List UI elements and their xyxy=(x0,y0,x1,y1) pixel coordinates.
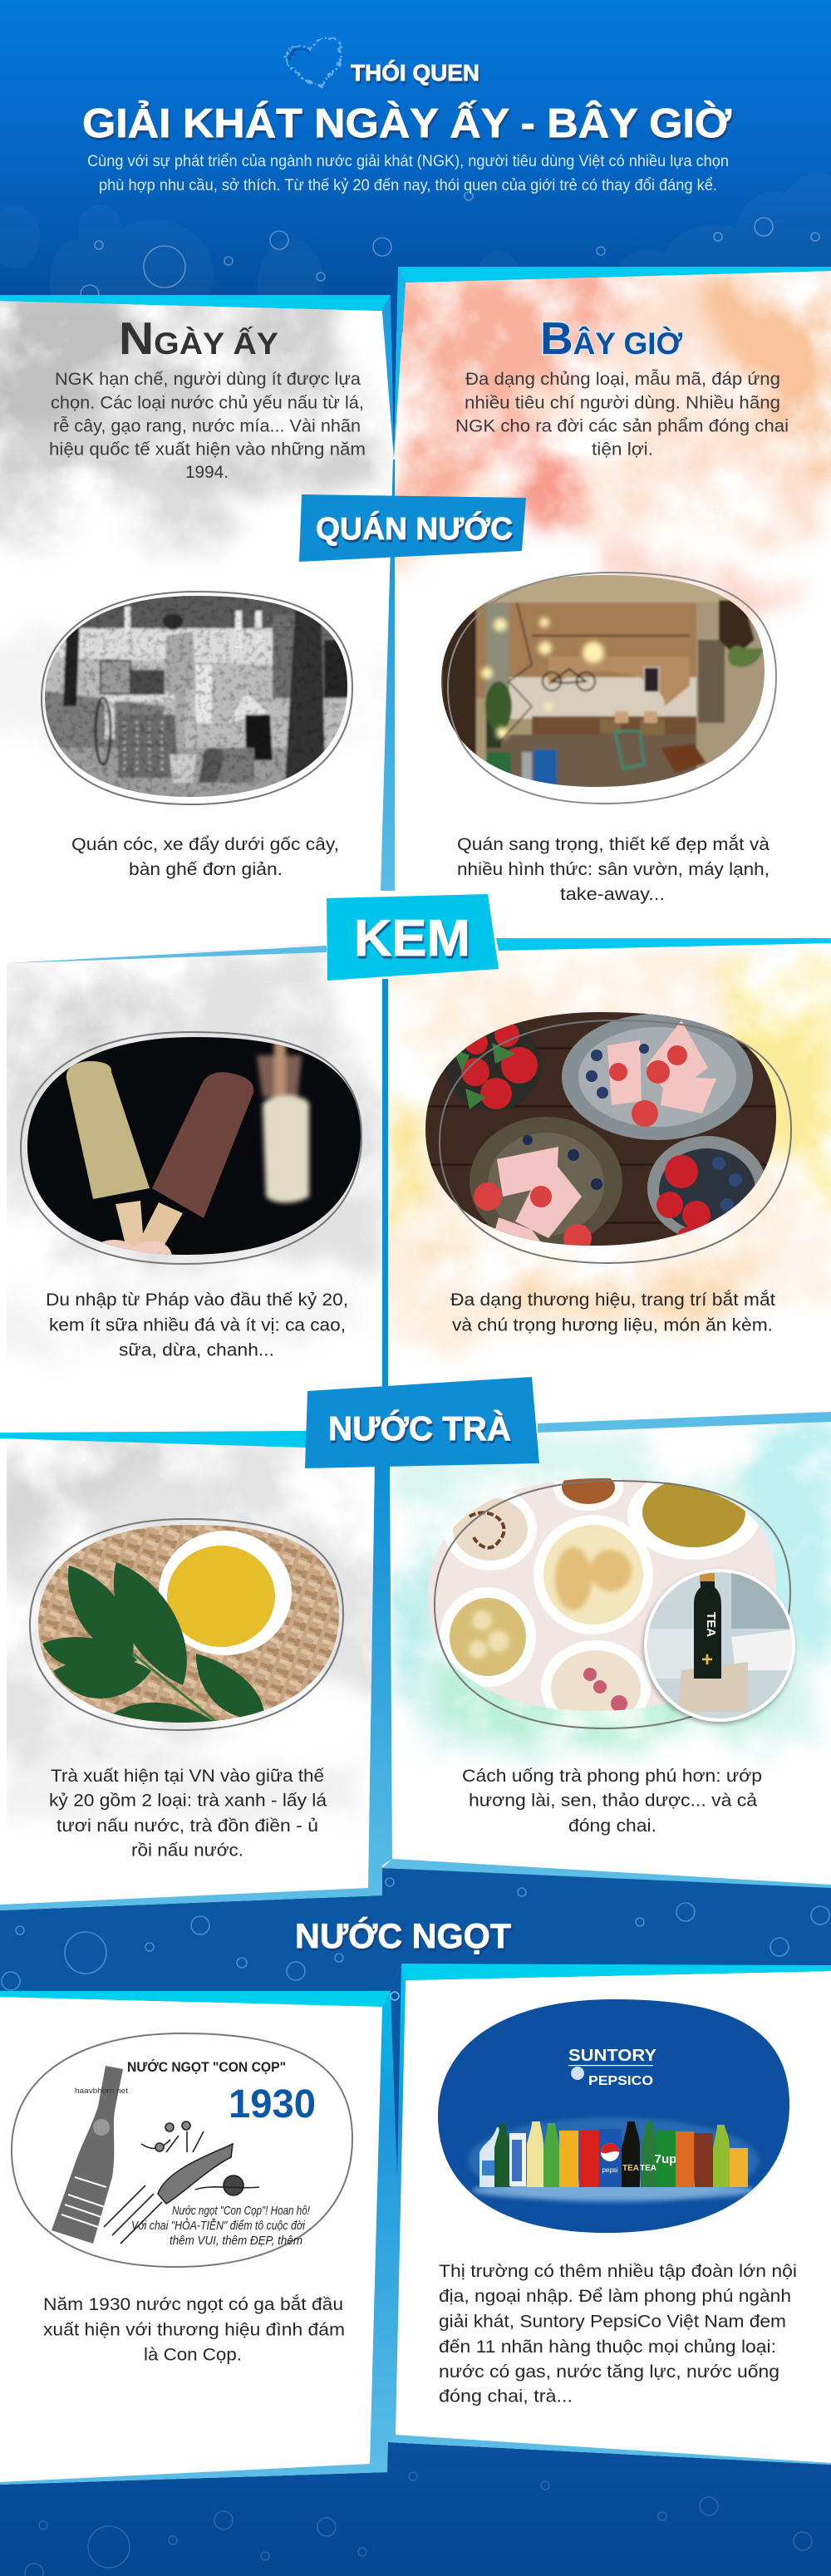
photo: street cart xyxy=(33,582,357,806)
text: ngày ấy intro: hiệu quốc tế xuất hiện vào những năm xyxy=(49,440,366,459)
bottom band xyxy=(0,2435,831,2576)
watermark: haavbhorn.net xyxy=(75,2087,129,2095)
year 1930: 1930 xyxy=(229,2082,316,2126)
inset: tea plus bottle: TEA xyxy=(704,1612,718,1637)
text: nước ngọt now: giải khát, Suntory PepsiCo Việt Nam đem xyxy=(439,2312,786,2332)
section band: nước ngọt xyxy=(0,1859,831,2011)
text: quán nước now: nhiều hình thức: sân vườn, máy lạnh, xyxy=(457,860,770,879)
logo: suntory: SUNTORY xyxy=(568,2047,657,2065)
text: bây giờ intro xyxy=(455,370,789,459)
tab: kem: KEM xyxy=(354,910,470,967)
text: kem now: Đa dạng thương hiệu, trang trí bắt mắt xyxy=(450,1290,775,1310)
photo: green tea xyxy=(30,1519,345,1734)
photo: con cọp ad xyxy=(12,2033,352,2267)
bands and divider: trà xyxy=(0,1412,831,1895)
ad slogan xyxy=(131,2204,311,2248)
heading: ngày ấy: NGÀY ẤY xyxy=(119,312,278,364)
panel: nước ngọt then xyxy=(0,1997,382,2482)
text: nước ngọt now: đến 11 nhãn hàng thuộc mọi chủng loại: xyxy=(439,2338,776,2357)
text: quán nước then: Quán cóc, xe đẩy dưới gốc cây, xyxy=(71,835,339,854)
text: quán nước then xyxy=(71,835,339,879)
photo: old popsicles xyxy=(21,1030,370,1264)
tab: quán nước: QUÁN NƯỚC xyxy=(316,510,513,547)
text: ngày ấy intro: chọn. Các loại nước chủ yếu nấu từ lá, xyxy=(51,394,364,412)
intro text: Cùng với sự phát triển của ngành nước giải khát (NGK), người tiêu dùng Việt có nhiều lựa chọn xyxy=(87,153,729,170)
text: nước ngọt now: đóng chai, trà... xyxy=(439,2387,573,2406)
ad slogan: thêm VUI, thêm ĐẸP, thêm xyxy=(170,2234,302,2248)
text: trà then: kỷ 20 gồm 2 loại: trà xanh - lấy lá xyxy=(49,1792,327,1810)
text: nước ngọt now: Thị trường có thêm nhiều tập đoàn lớn nội xyxy=(439,2262,797,2281)
main title: GIẢI KHÁT NGÀY ẤY - BÂY GIỜ xyxy=(82,101,731,146)
text: nước ngọt now xyxy=(439,2262,797,2406)
inset: tea plus bottle xyxy=(644,1569,798,1723)
heading: bây giờ: BÂY GIỜ xyxy=(540,312,682,364)
panel: bây giờ watercolor xyxy=(395,271,831,625)
text: ngày ấy intro: rễ cây, gạo rang, nước mía... Vài nhãn xyxy=(53,417,361,435)
text: kem then: sữa, dừa, chanh... xyxy=(119,1341,274,1359)
text: bây giờ intro: tiện lợi. xyxy=(592,440,653,459)
text: ngày ấy intro xyxy=(49,370,366,482)
text: trà then: Trà xuất hiện tại VN vào giữa thế xyxy=(51,1767,324,1786)
logo: pepsico: PEPSICO xyxy=(588,2074,653,2088)
bands and wedges: nước ngọt xyxy=(0,1964,831,2472)
text: quán nước now xyxy=(457,835,770,904)
logo: pepsico xyxy=(571,2067,653,2088)
panel: nước ngọt now xyxy=(396,1971,831,2463)
panel: kem now watercolor xyxy=(386,943,831,1346)
text: ngày ấy intro: NGK hạn chế, người dùng ít được lựa xyxy=(55,370,361,389)
product row: pepsi xyxy=(602,2166,618,2174)
ad slogan: Nước ngọt "Con Cọp"! Hoan hô! xyxy=(172,2204,311,2218)
icon: water heart xyxy=(283,37,340,85)
ad headline: NƯỚC NGỌT "CON CỌP" xyxy=(127,2059,286,2075)
text: bây giờ intro: NGK cho ra đời các sản phẩm đóng chai xyxy=(455,417,789,435)
kicker: THÓI QUEN: THÓI QUEN xyxy=(351,60,479,86)
text: bây giờ intro: Đa dạng chủng loại, mẫu mã, đáp ứng xyxy=(465,370,780,389)
bottle drawing xyxy=(52,2066,123,2244)
text: nước ngọt then: xuất hiện với thương hiệu đình đám xyxy=(43,2320,345,2340)
inset: tea plus bottle: + xyxy=(701,1649,713,1671)
text: trà then xyxy=(49,1767,327,1860)
ad slogan: Với chai "HỎA-TIỄN" điểm tô cuộc đời xyxy=(131,2218,306,2233)
text: kem now xyxy=(450,1290,775,1335)
text: quán nước now: Quán sang trọng, thiết kế đẹp mắt và xyxy=(457,835,770,854)
tab: kem xyxy=(327,894,499,981)
title block xyxy=(82,60,731,194)
text: trà then: tươi nấu nước, trà đồn điền - ủ xyxy=(57,1816,318,1836)
photo: tea varieties xyxy=(424,1464,798,1733)
photo: modern popsicles xyxy=(420,1005,791,1263)
text: quán nước now: take-away... xyxy=(560,885,665,904)
text: trà now: hương lài, sen, thảo dược... và cả xyxy=(469,1792,757,1810)
text: nước ngọt now: nước có gas, nước tăng lực, nước uống xyxy=(439,2362,779,2382)
text: ngày ấy intro: 1994. xyxy=(185,463,229,482)
text: bây giờ intro: nhiều tiêu chí người dùng. Nhiều hãng xyxy=(465,394,780,412)
rocket illustration xyxy=(104,2121,259,2244)
bands and divider: kem xyxy=(8,938,831,1388)
intro text: phù hợp nhu cầu, sở thích. Từ thế kỷ 20 đến nay, thói quen của giới trẻ có thay đổi đáng kể. xyxy=(99,177,717,194)
photo: modern cafe xyxy=(436,569,776,804)
text: quán nước then: bàn ghế đơn giản. xyxy=(129,860,283,879)
text: trà now: đóng chai. xyxy=(568,1816,656,1836)
panel: kem then watercolor xyxy=(0,956,391,1352)
text: nước ngọt then xyxy=(43,2295,345,2365)
text: nước ngọt now: địa, ngoại nhập. Để làm phong phú ngành xyxy=(439,2287,791,2306)
tab: quán nước xyxy=(299,494,526,562)
intro text xyxy=(87,153,729,194)
heading: nước ngọt: NƯỚC NGỌT xyxy=(295,1915,511,1955)
text: trà then: rồi nấu nước. xyxy=(131,1841,243,1860)
product row: TEA xyxy=(640,2164,656,2173)
text: kem then: Du nhập từ Pháp vào đầu thế kỷ 20, xyxy=(46,1290,348,1310)
top bands and dividers xyxy=(0,267,831,891)
header band xyxy=(0,0,831,341)
panel: ngày ấy watercolor xyxy=(0,301,394,745)
product row: TEA xyxy=(622,2164,639,2173)
panel: trà then watercolor xyxy=(0,1438,391,1821)
tab: nước trà: NƯỚC TRÀ xyxy=(328,1409,511,1448)
panel: trà now watercolor xyxy=(392,1423,831,1756)
tab: nước trà xyxy=(305,1377,539,1468)
text: kem then xyxy=(46,1290,348,1359)
text: kem then: kem ít sữa nhiều đá và ít vị: ca cao, xyxy=(49,1316,346,1335)
product row: 7up xyxy=(655,2152,676,2166)
text: nước ngọt then: Năm 1930 nước ngọt có ga bắt đầu xyxy=(43,2295,343,2314)
text: kem now: và chú trọng hương liệu, món ăn kèm. xyxy=(452,1316,773,1335)
text: nước ngọt then: là Con Cọp. xyxy=(144,2345,242,2365)
product row xyxy=(468,2117,759,2204)
photo: suntory pepsico xyxy=(438,1999,789,2233)
text: trà now xyxy=(462,1767,762,1836)
text: trà now: Cách uống trà phong phú hơn: ướp xyxy=(462,1767,762,1786)
